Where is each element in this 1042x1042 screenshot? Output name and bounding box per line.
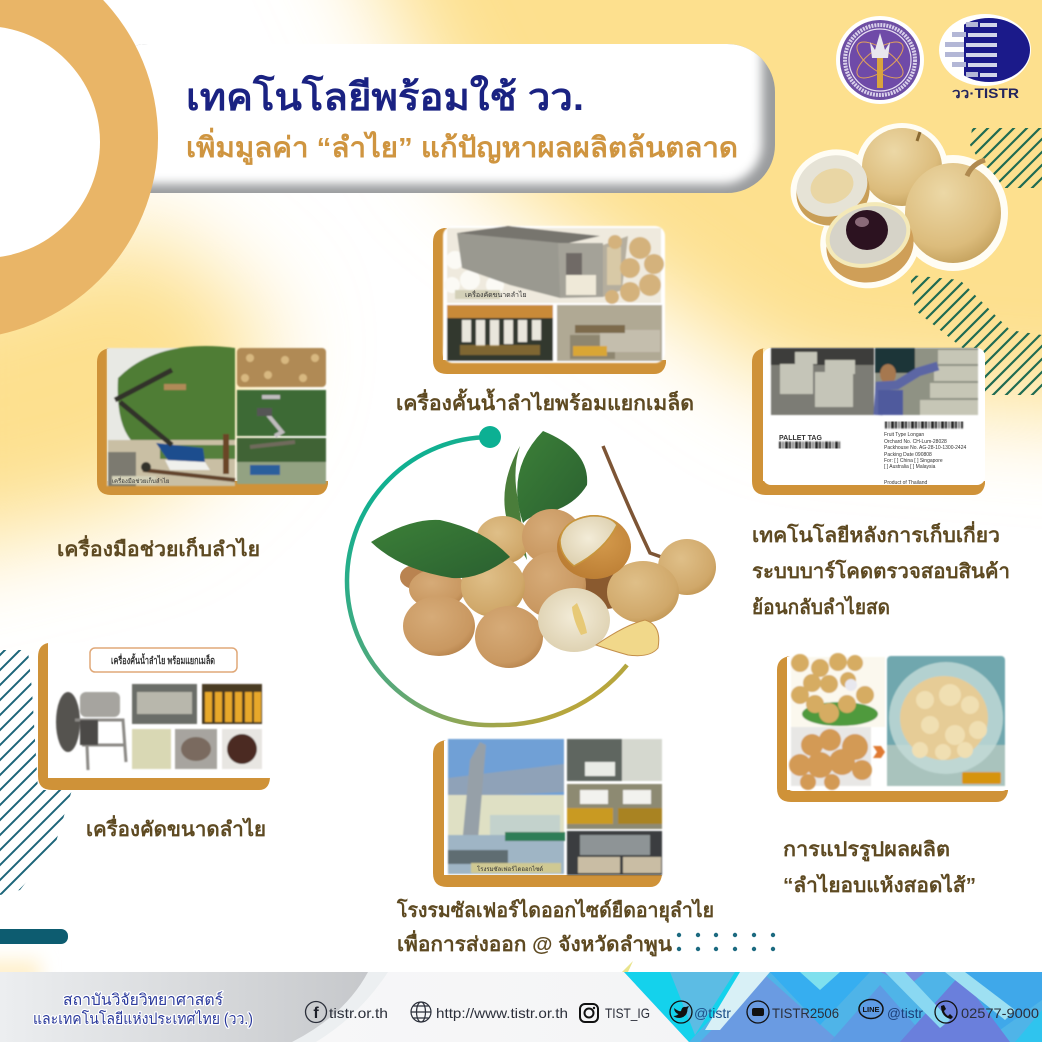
footer [0,972,1042,1042]
contact: youtube [747,1001,839,1023]
caption: harvesting tool: เครื่องมือช่วยเก็บลำไย [57,534,260,561]
label box [90,648,237,672]
panel: right-lower dried longan [777,653,1008,802]
panel: left-lower sorter [38,643,270,790]
panel: right barcode traceability: PALLET TAG [779,435,822,442]
caption: product processing: การแปรรูปผลผลิต [783,839,950,863]
caption: product processing: “ลำไยอบแห้งสอดไส้” [783,873,976,897]
contact: line: LINE [862,1005,880,1014]
caption: sorting machine: เครื่องคัดขนาดลำไย [86,814,266,841]
contact: website [411,1002,568,1022]
logo: TISTR [939,14,1031,101]
panel: left harvester [97,346,328,495]
corner ring [0,0,158,339]
organisation name: สถาบันวิจัยวิทยาศาสตร์ [63,991,223,1009]
contact: website: http://www.tistr.or.th [436,1005,568,1021]
decorative dots [677,933,775,951]
panel: right barcode traceability: Orchard No. CH-Lum-28028 [884,439,947,445]
title: เทคโนโลยีพร้อมใช้ วว. [186,74,584,119]
caption: post-harvest technology: เทคโนโลยีหลังการเก็บเกี่ยว [752,520,1000,547]
contact: facebook [306,1002,388,1022]
green stripes upper [970,128,1042,188]
icon: longan fruit cluster [780,123,1008,299]
contact: twitter: @tistr [694,1005,731,1021]
panel: left harvester: เครื่องมือช่วยเก็บลำไย [112,476,169,485]
contact: twitter [670,1001,731,1023]
contact: facebook: tistr.or.th [329,1005,388,1021]
contact: facebook: f [313,1005,319,1022]
organisation name: และเทคโนโลยีแห่งประเทศไทย (วว.) [33,1010,253,1028]
organisation name [33,991,253,1028]
caption: sulfur dioxide fumigation [396,898,714,958]
teal stripes left [0,650,72,895]
contact: line: @tistr [887,1005,923,1021]
title banner [136,44,775,193]
contact: youtube: TISTR2506 [772,1005,839,1021]
panel: right barcode traceability: Packhouse No. AG-28-10-1300-2424 [884,445,966,451]
blue mosaic [620,972,1042,1042]
contact: phone [935,1001,1039,1023]
panel: right barcode traceability: For: [ ] China [ ] Singapore [884,458,943,464]
panel: top centre machine: เครื่องคัดขนาดลำไย [465,290,527,299]
panel: right barcode traceability: Fruit Type Longan [884,432,924,438]
contact: line [859,1000,923,1021]
panel: top centre machine [433,226,666,374]
panel: right barcode traceability [752,348,985,495]
panel: bottom centre sulfur fumigation [433,739,662,887]
contact: instagram: TIST_IG [605,1005,650,1021]
logo: TISTR: วว·TISTR [952,85,1019,101]
logo: ministry seal [836,16,924,104]
caption: post-harvest technology [752,520,1010,619]
green stripes lower [910,276,1042,395]
caption: product processing [783,839,976,897]
subtitle: เพิ่มมูลค่า “ลำไย” แก้ปัญหาผลผลิตล้นตลาด [186,127,738,165]
leaf: large upright [517,431,587,523]
panel: right barcode traceability: Packing Date 090808 [884,452,932,458]
caption: sulfur dioxide fumigation: เพื่อการส่งออก @ จังหวัดลำพูน [397,929,672,958]
caption: post-harvest technology: ระบบบาร์โคดตรวจสอบสินค้า [752,559,1010,583]
teal bar [0,929,68,944]
yellow sliver [622,961,633,972]
contact: phone: 02577-9000 [961,1005,1039,1021]
panel: right barcode traceability: [ ] Australia [ ] Malaysia [884,464,936,470]
panel: right barcode traceability: Product of Thailand [884,480,927,486]
contact: instagram [580,1004,650,1022]
caption: post-harvest technology: ย้อนกลับลำไยสด [752,595,890,619]
leaf: narrow [504,446,527,560]
central longan photo [371,431,716,668]
panel: bottom centre sulfur fumigation: โรงรมซัลเฟอร์ไดออกไซด์ [477,865,543,873]
caption: juicer: เครื่องคั้นน้ำลำไยพร้อมแยกเมล็ด [396,388,694,415]
label box: เครื่องคั้นน้ำลำไย พร้อมแยกเมล็ด [111,653,215,667]
leaf: left [371,520,510,578]
circular arc with dot [347,426,627,725]
twig [603,446,670,560]
caption: sulfur dioxide fumigation: โรงรมซัลเฟอร์ไดออกไซด์ยืดอายุลำไย [396,898,714,923]
